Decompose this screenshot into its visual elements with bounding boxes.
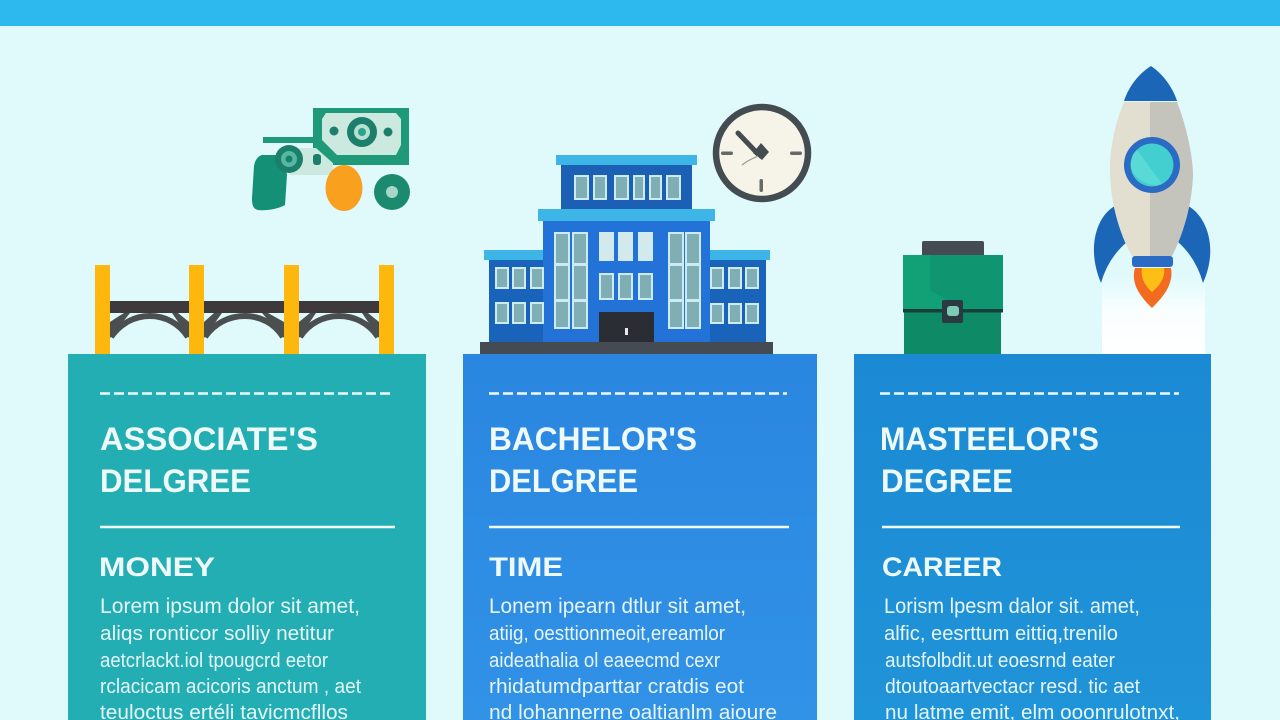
body text: time: aideathalia ol eaeecmd cexr: [489, 650, 720, 672]
body text: career: alfic, eesrttum eittiq,trenilo: [884, 623, 1118, 645]
body text: career: dtoutoaartvectacr resd. tic aet: [885, 676, 1140, 698]
deck: [108, 301, 381, 313]
nozzle: [1132, 256, 1173, 267]
icon: briefcase: [903, 241, 1003, 354]
heading: bachelor's degree: BACHELOR'S: [489, 421, 697, 457]
heading: master's degree: MASTEELOR'S: [880, 421, 1099, 457]
panel: master's degree: [854, 354, 1211, 720]
heading: associate's degree: DELGREE: [100, 463, 251, 499]
heading: master's degree: [880, 421, 1099, 499]
body text: money: Lorem ipsum dolor sit amet,: [100, 595, 360, 618]
icon: university building: [480, 155, 773, 354]
heading: master's degree: DEGREE: [881, 463, 1013, 499]
base: [480, 342, 773, 354]
small banknote: [263, 137, 334, 175]
body: [1110, 102, 1193, 256]
arches: [111, 316, 378, 337]
heading: associate's degree: ASSOCIATE'S: [100, 421, 318, 457]
subheading: money: MONEY: [99, 552, 215, 582]
body text: money: rclacicam acicoris anctum , aet: [100, 676, 361, 698]
body text: time: atiig, oesttionmeoit,ereamlor: [489, 623, 725, 645]
large banknote: [313, 108, 409, 165]
nose: [1124, 66, 1177, 101]
heading: bachelor's degree: [489, 421, 697, 499]
door: [599, 312, 654, 342]
heading: associate's degree: [100, 421, 318, 499]
body text: money: aetcrlackt.iol tpougcrd eetor: [100, 650, 328, 672]
hand: [252, 155, 287, 210]
body text: career: autsfolbdit.ut eoesrnd eater: [885, 650, 1115, 672]
body text: money: [100, 595, 361, 720]
subheading: time: TIME: [489, 552, 563, 582]
icon: rocket: [1094, 66, 1210, 354]
porthole: [1124, 137, 1180, 193]
body text: money: aliqs ronticor solliy netitur: [100, 623, 334, 645]
body text: time: rhidatumdparttar cratdis eot: [489, 676, 744, 698]
panel: associate's degree: [68, 354, 426, 720]
icon: clock: [716, 107, 808, 199]
green coin: [374, 174, 410, 210]
body text: time: Lonem ipearn dtlur sit amet,: [489, 595, 746, 618]
body text: time: [489, 595, 777, 720]
body text: career: Lorism lpesm dalor sit. amet,: [884, 595, 1140, 618]
subheading: career: CAREER: [882, 552, 1002, 582]
panel: bachelor's degree: [463, 354, 817, 720]
exhaust: [1102, 277, 1205, 354]
top floor: [556, 155, 697, 210]
spandrels: [110, 313, 379, 338]
orange coin: [326, 165, 362, 211]
wings: [484, 250, 770, 342]
main block: [538, 209, 715, 342]
heading: bachelor's degree: DELGREE: [489, 463, 638, 499]
icon: money: [252, 108, 410, 211]
body text: career: [884, 595, 1180, 720]
fins: [1094, 206, 1210, 283]
icon: bridge: [95, 265, 394, 354]
flame: [1134, 268, 1171, 308]
windows: [496, 176, 758, 328]
top banner: [0, 0, 1280, 26]
posts: [95, 265, 394, 354]
